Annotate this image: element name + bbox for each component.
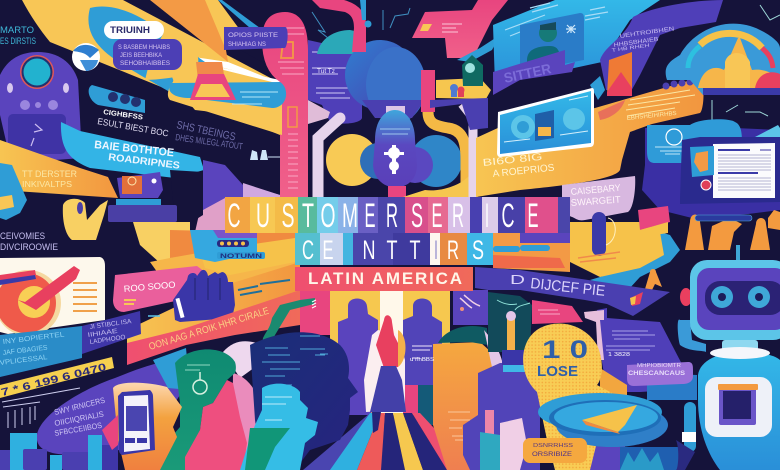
text: left lower captions: CEIVOMIES — [0, 231, 45, 241]
icon: orange figures — [645, 210, 780, 290]
panel: light-blue dashboard screen — [497, 88, 594, 157]
panel: purple blob with text: HHBSBHAIEB — [613, 37, 659, 49]
panel: right purple note block: 1 3828 — [608, 352, 630, 358]
icon: pink tower — [262, 12, 308, 197]
banner: purple sitter strip — [493, 50, 575, 95]
icon: yellow hand — [63, 199, 108, 240]
panel: yellow and blue pod with pink bell — [168, 62, 286, 135]
heading text: top left caption: ES DIRSTIS — [0, 36, 36, 46]
panel: top-left diagonal yellow band — [22, 0, 280, 135]
title text row 1: I — [485, 197, 489, 235]
panel: large purple speech bubble: SFBCCEIIBOS — [54, 421, 103, 438]
title: customer service tiles — [225, 197, 558, 235]
panel: light-blue headline banner — [61, 122, 204, 178]
panel: orange flowing card: BI6O 8IG — [482, 152, 543, 169]
panel: large purple speech bubble: OIICIIQRIALIS — [54, 410, 104, 428]
panel: dark teal candle block — [488, 292, 532, 365]
panel: small pink card — [635, 206, 670, 238]
icon: purple robot — [0, 52, 82, 160]
text: left lower captions — [0, 231, 58, 252]
bubble text: SEHOBHAIBBES — [120, 61, 170, 67]
text block: middle dark captions: SHS TBEINGS — [175, 119, 237, 143]
tag: orange lower pill — [523, 438, 587, 463]
panel: figures on yellow shelf — [430, 78, 491, 130]
title text row 1 — [228, 197, 538, 235]
panel: light-blue video card — [493, 0, 660, 85]
title: latin america band: LATIN AMERICA — [308, 269, 462, 288]
panel: orange flowing card: A ROEPRIOS — [492, 163, 555, 180]
panel: blue info block — [0, 326, 82, 377]
bubble text: S BASBEM HHAIBS — [118, 45, 170, 51]
chart: floor stripes — [303, 413, 473, 470]
panel: flowing yellow under title — [570, 212, 680, 290]
chart: yellow bulb with ten lose: LOSE — [537, 363, 578, 380]
tag: purple note on tower: OPIOS PIISTE — [228, 32, 279, 39]
title text row 2 — [302, 235, 484, 265]
panel: blue info block: INY BOPIERTEL — [2, 331, 65, 346]
title text row 1: O — [320, 197, 336, 235]
belly panel — [705, 377, 772, 437]
figure: large navy head with text lines — [250, 300, 358, 470]
panel: right purple note block — [584, 308, 685, 392]
chart: bottom bars — [0, 433, 118, 470]
banner: yellow number strip — [0, 357, 114, 399]
text: left lower captions: DIVCIROOWIE — [0, 242, 58, 252]
panel: blue info block: VPLICESSAL — [0, 354, 48, 367]
panel: purple info block: LADPHOOO — [89, 334, 126, 346]
icon: dome with gauge — [666, 24, 780, 95]
title text row 1: R — [452, 197, 464, 235]
panel: ridge behind pod — [190, 104, 282, 134]
icon: blue blob above screen — [590, 76, 605, 100]
title text row 2: T — [410, 235, 420, 265]
icon: white pipe left — [318, 118, 340, 197]
text: right silhouette caption: u rinBBS — [410, 357, 435, 363]
figure: pink head — [185, 380, 247, 470]
banner: yellow number strip: 7 * 6 199 6 0470 — [0, 361, 108, 399]
banner: coral slanted ribbon: OON AAG A ROIK HHR CIRALE — [148, 306, 271, 353]
arm — [678, 320, 706, 352]
panel: purple info block — [82, 311, 141, 354]
tag: purple note on tower — [224, 27, 288, 50]
panel: purple info block: JI STIBCL ISA — [89, 318, 133, 331]
title text row 1: T — [302, 197, 314, 235]
panel: pink tag with hand chart — [113, 266, 205, 312]
title text row 1: E — [432, 197, 442, 235]
tag: purple note on tower: SHIAHIAG NS — [228, 41, 267, 48]
title text row 2: N — [362, 235, 376, 265]
tag: lavender caption: CAISEBARY — [570, 183, 622, 198]
title text row 1: M — [342, 197, 358, 235]
antenna and ear — [680, 245, 740, 306]
icon: yellow circle — [326, 134, 378, 186]
icon: teal dome — [317, 30, 360, 54]
chart: yellow bulb with ten lose: 1 0 — [542, 336, 588, 364]
panel: blue info block: JAF OBAGIES — [2, 345, 48, 357]
title text row 2: C — [302, 235, 314, 265]
panel: blue camera icon strip: CIGHBFSS — [103, 109, 144, 122]
video frame — [520, 13, 584, 72]
panel: purple info block: IIHIAAE — [87, 328, 119, 339]
panel: light-blue headline banner: ROADRIPNES — [108, 152, 181, 172]
icon: phone — [102, 390, 155, 455]
panel: center columns — [300, 290, 450, 415]
panel: lavender ground behind purple ribbon — [195, 185, 280, 232]
panel: left yellow strip: INKIVALTPS — [22, 180, 72, 189]
figure: green head — [157, 349, 236, 470]
panel: mid blue card — [647, 119, 742, 163]
icon: robot — [678, 245, 780, 470]
panel: teal ground and skyline — [620, 373, 697, 470]
title text row 1: C — [502, 197, 514, 235]
icon: blue circles — [360, 135, 462, 187]
collar — [710, 347, 770, 359]
icon: white pipe right — [462, 104, 473, 197]
tag: lavender caption pill: CHESCANCAUS — [628, 370, 686, 377]
icon: big blue sphere — [345, 40, 426, 123]
icon: camera device — [108, 172, 190, 263]
text block: middle dark captions — [97, 116, 244, 151]
tag: orange lower pill: DSNRRHSS — [533, 443, 573, 449]
neck — [722, 340, 758, 352]
title text row 1: C — [228, 197, 240, 235]
figure: lavender back arc — [223, 341, 262, 378]
icon: light-blue back shape — [153, 348, 190, 390]
icon: platter with wedge — [538, 393, 696, 470]
icon: binoculars — [250, 150, 280, 160]
icon: neck — [386, 106, 405, 120]
panel: left purple stripes block — [453, 290, 488, 325]
panel: left yellow strip — [0, 140, 118, 198]
title text row 1: E — [364, 197, 376, 235]
body — [698, 352, 780, 470]
icon: purple data block: Tut Tz — [317, 69, 335, 75]
panel: title backing shapes — [127, 197, 570, 345]
panel: blue device with purple cap — [190, 230, 265, 262]
icon: purple data block — [308, 40, 362, 124]
panel: large purple speech bubble: SWY IRNICERS — [53, 396, 106, 417]
label: triumph: TRIUINH — [110, 25, 150, 36]
banner: purple diagonal dicer: D — [510, 272, 525, 287]
panel: right dark purple head and lavender hair — [463, 330, 540, 470]
banner: purple diagonal dicer — [475, 267, 670, 316]
title text row 2: E — [322, 235, 334, 265]
icon: globe — [72, 43, 100, 71]
tag: orange lower pill: ORSRIBIZE — [532, 451, 573, 458]
panel: purple blob with text: UEHTROIBHEN — [619, 26, 675, 40]
panel: purple ribbon block — [170, 160, 280, 232]
decorative lines: circuit strokes — [312, 8, 410, 38]
panel: blue camera icon strip — [89, 85, 145, 122]
tag: lavender caption pill — [627, 362, 693, 386]
panel: purple blob with text: T HB RHEH — [611, 43, 650, 54]
decorative dashes — [238, 280, 290, 295]
banner: purple sitter strip: SITTER — [502, 60, 553, 86]
icon: pink pipe top — [312, 0, 372, 52]
panel: laptop screen — [680, 125, 780, 204]
text block: middle dark captions: DHES MILEGL ATOUT — [175, 132, 244, 151]
icon: red post — [388, 186, 406, 198]
head — [690, 260, 780, 340]
panel: circuit lines on the right — [712, 5, 780, 120]
banner: coral slanted ribbon — [127, 290, 300, 365]
title: centers tiles row — [295, 233, 493, 265]
bubble text: JEIS BEEHBIKA — [120, 53, 162, 59]
panel: orange card with triangle — [607, 52, 632, 96]
heading text: top left caption — [0, 25, 36, 46]
icon: small arrow dash — [148, 315, 160, 317]
chart: small dark table — [2, 388, 80, 428]
title text row 2: R — [447, 235, 459, 265]
panel: purple blob with text — [600, 0, 723, 93]
title text row 2: T — [386, 235, 398, 265]
figure: orange head — [113, 383, 182, 470]
title text row 1: U — [256, 197, 270, 235]
panel: deep purple blob — [642, 126, 780, 220]
panel: light-blue headline banner: BAIE BOTHTOE — [94, 139, 175, 159]
title text row 2: S — [472, 235, 484, 265]
icon: yellow-orange pipe — [403, 70, 472, 197]
title text row 1: S — [411, 197, 423, 235]
icon: pink arrow shape — [412, 0, 508, 58]
panel: orange flowing card: EBHSHEIHIRHBS — [627, 111, 677, 122]
bubble text — [113, 39, 182, 70]
icon: drone — [457, 35, 500, 86]
banner: purple diagonal dicer: DIJCEF PIE — [530, 275, 606, 300]
tag: dark pill — [695, 215, 752, 221]
icon: blue cube — [0, 163, 27, 220]
title text row 1: S — [282, 197, 294, 235]
tag: lavender caption: SWARGEIT — [570, 195, 621, 209]
panel: right orange panel — [433, 326, 500, 470]
chart: navy hand bars — [173, 270, 235, 322]
panel: orange flowing card — [476, 78, 704, 197]
figure: central walking person — [364, 315, 406, 433]
figure: light blue head — [240, 384, 318, 470]
tag: lavender caption — [562, 176, 635, 220]
panel: pink tag with hand chart: ROO SOOO — [123, 279, 176, 294]
figure: lavender side head — [232, 373, 263, 470]
title text row 2: I — [434, 235, 438, 265]
title: customer service tiles: E — [528, 197, 538, 235]
title: latin america band — [295, 267, 473, 291]
panel: blue device with purple cap: NOTUMN — [220, 254, 262, 260]
panel: white gauge card — [0, 257, 105, 336]
tag: lavender caption pill: MHPIOBIOMTR — [637, 363, 681, 369]
panel: lower purple behind bulb — [587, 440, 625, 470]
panel: triumph speech bubbles — [88, 6, 208, 95]
panel: pink note — [532, 300, 583, 324]
figure: teal branch above navy head — [262, 298, 315, 345]
text block: middle dark captions: ESULT BIEST BOC — [97, 116, 170, 139]
chart: yellow bulb with ten lose — [523, 323, 627, 470]
panel: large purple speech bubble — [37, 360, 190, 455]
icon: central bulb with cross — [373, 110, 417, 188]
figure: right silhouette — [403, 298, 442, 425]
title text row 1: R — [386, 197, 398, 235]
figure: left silhouette — [338, 298, 378, 415]
heading text: top left caption: MARTO — [0, 25, 34, 35]
panel: left yellow strip: TT DERSTER — [22, 169, 77, 179]
